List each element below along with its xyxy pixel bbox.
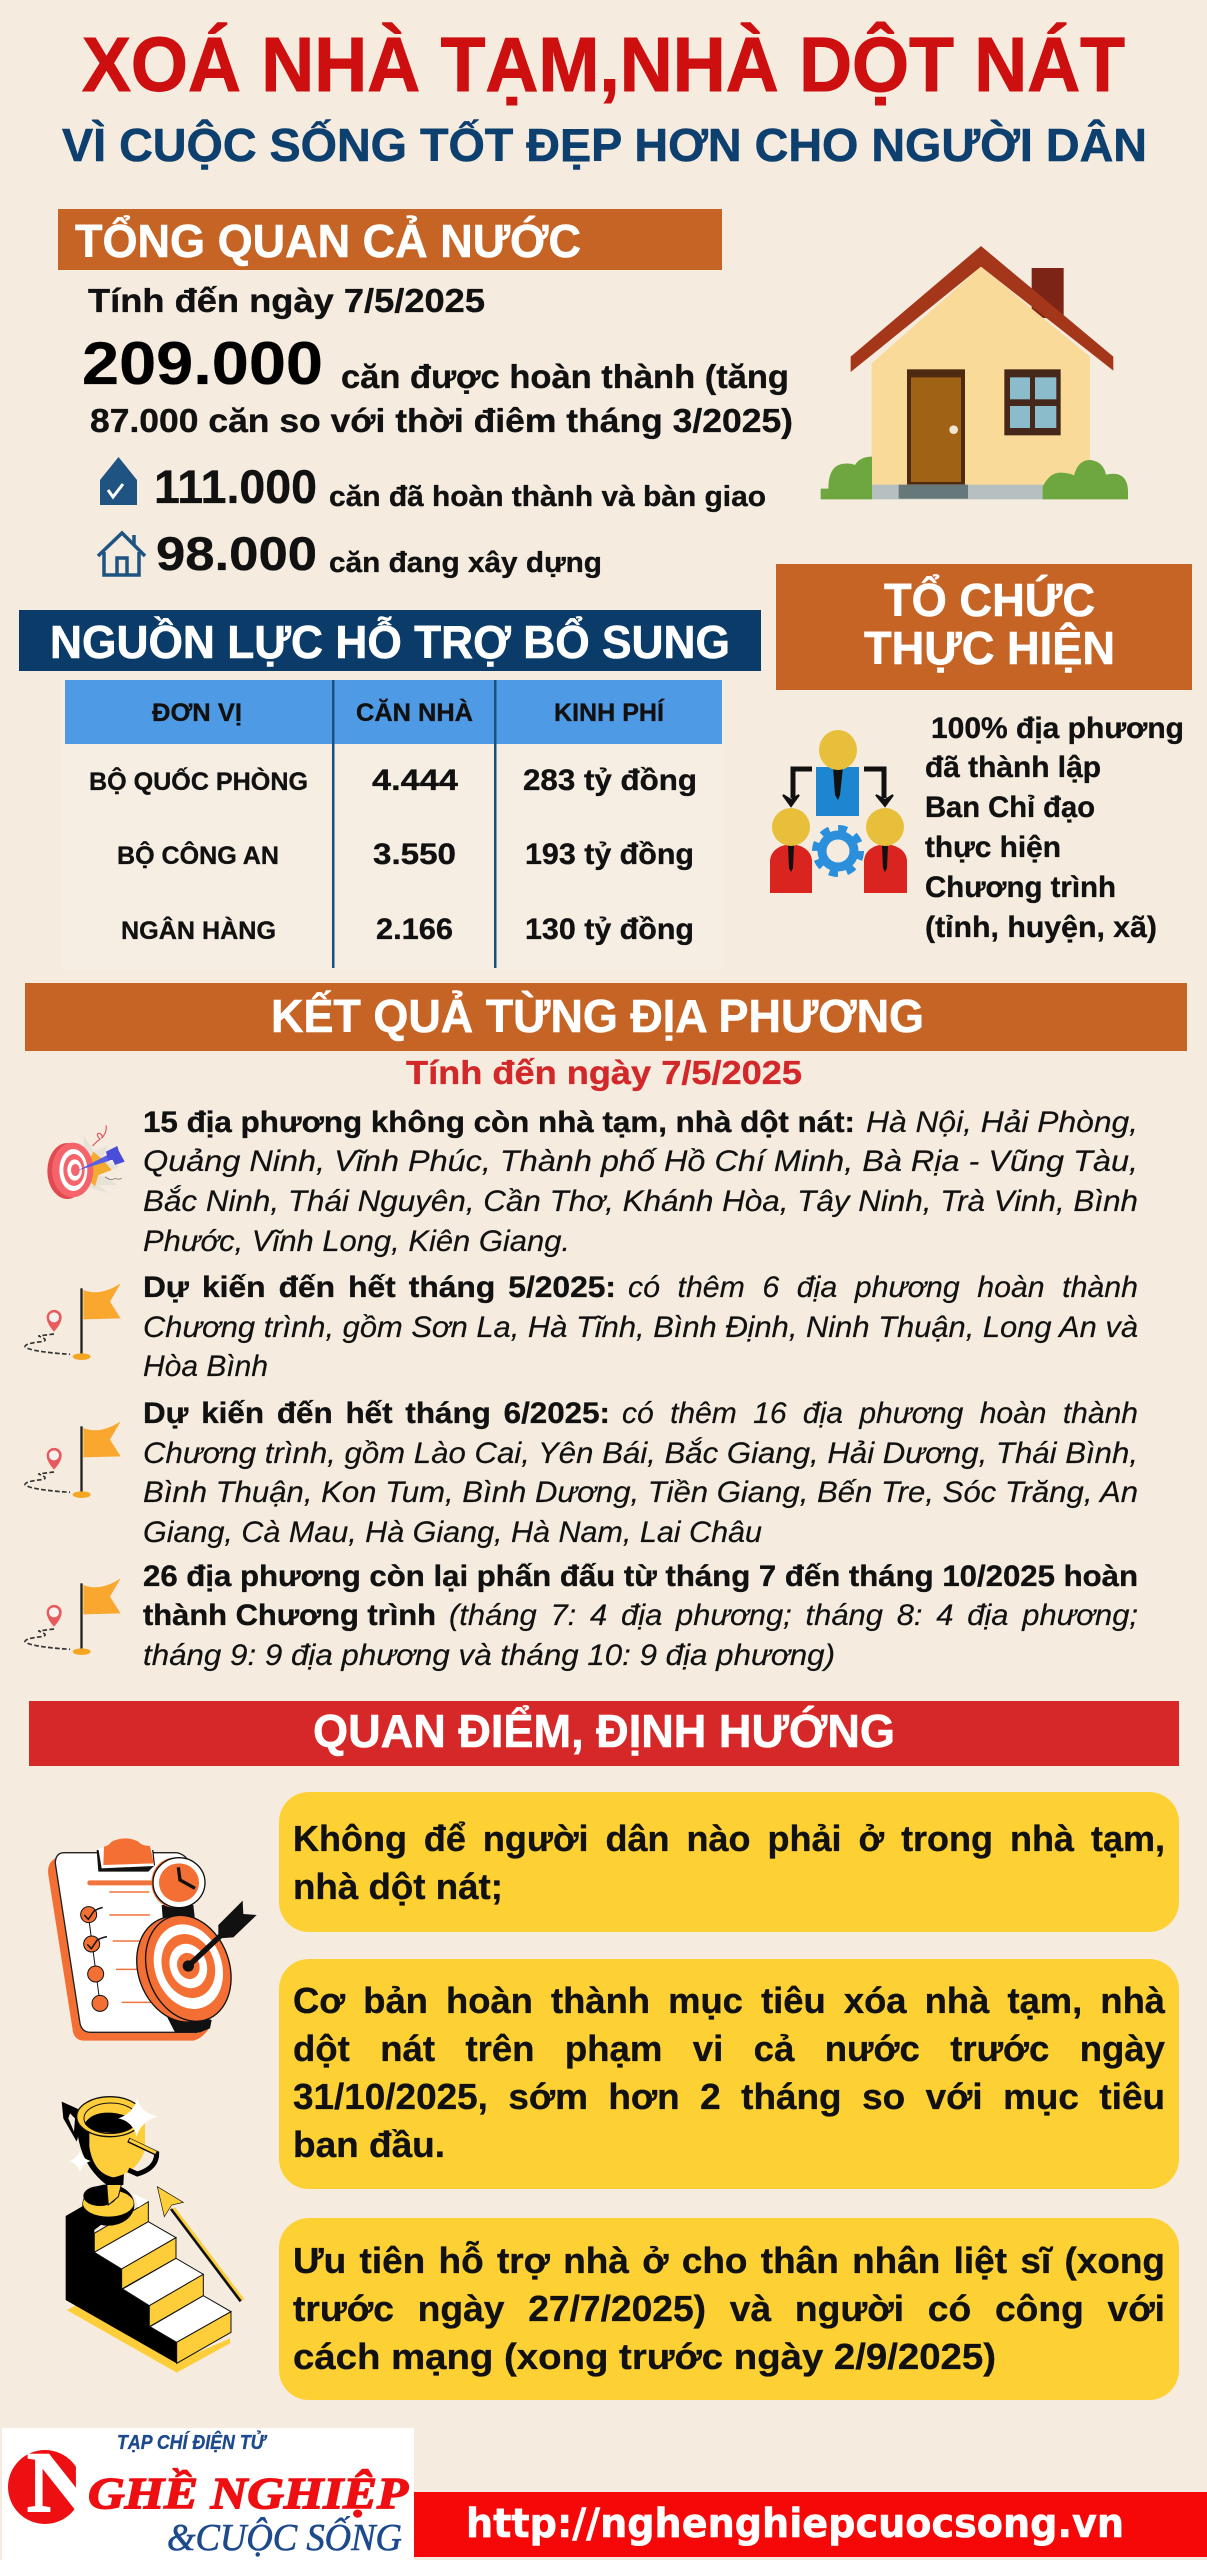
text: by end of 5/2025: Dự kiến đến hết tháng 5/2025: [143, 1271, 616, 1304]
stat: 98.000 under construction: 98.000 [156, 527, 317, 580]
table: 193 tỷ đồng [525, 838, 694, 871]
website banner: http://nghenghiepcuocsong.vn [466, 2501, 1124, 2547]
table: 283 tỷ đồng [523, 764, 697, 797]
text: by end of 5/2025 [143, 1271, 1138, 1383]
text: by end of 5/2025: có thêm 6 địa phương hoàn thành [628, 1271, 1138, 1304]
text: steering committee: (tỉnh, huyện, xã) [925, 911, 1157, 944]
website banner [414, 2492, 1207, 2557]
table: 3.550 [373, 838, 456, 871]
text: steering committee [925, 712, 1184, 944]
icon: flag 2 [25, 1421, 121, 1498]
stat: 98.000 under construction: căn đang xây dựng [329, 547, 602, 579]
heading: viewpoints: QUAN ĐIỂM, ĐỊNH HƯỚNG [313, 1705, 895, 1757]
table: KINH PHÍ [554, 698, 665, 727]
icon: team with gear [770, 730, 907, 893]
text: 15 localities: Phước, Vĩnh Long, Kiên Giang. [143, 1225, 570, 1258]
callout: complete before 31/10/2025: Cơ bản hoàn thành mục tiêu xóa nhà tạm, nhà [293, 1980, 1166, 2021]
heading: additional resources: NGUỒN LỰC HỖ TRỢ BỔ SUNG [50, 616, 730, 668]
stat: 209.000 completed: căn được hoàn thành (tăng [341, 358, 789, 395]
heading: implementation: TỔ CHỨC [884, 574, 1095, 626]
stat: 111.000 handed over: 111.000 [154, 460, 317, 513]
text: by end of 6/2025: Giang, Cà Mau, Hà Giang, Hà Nam, Lai Châu [143, 1516, 762, 1549]
panel: implementation [770, 564, 1192, 944]
logo: TẠP CHÍ ĐIỆN TỬ [117, 2430, 268, 2454]
text: remaining 26 localities: tháng 9: 9 địa phương và tháng 10: 9 địa phương) [143, 1639, 835, 1672]
callout: priority support: trước ngày 27/7/2025) và người có công với [293, 2288, 1165, 2329]
text: 15 localities [143, 1106, 1138, 1258]
table: BỘ QUỐC PHÒNG [89, 766, 308, 796]
stat: 98.000 under construction [156, 527, 602, 580]
callout: complete before 31/10/2025 [279, 1959, 1179, 2189]
text: 15 localities: Bắc Ninh, Thái Nguyên, Cần Thơ, Khánh Hòa, Tây Ninh, Trà Vinh, Bình [143, 1185, 1138, 1218]
icon: house outline [98, 533, 145, 575]
text: remaining 26 localities: 26 địa phương còn lại phấn đấu từ tháng 7 đến tháng 10/2025 hoàn [143, 1560, 1138, 1593]
icon: target [47, 1125, 125, 1199]
text: remaining 26 localities: (tháng 7: 4 địa phương; tháng 8: 4 địa phương; [449, 1599, 1138, 1632]
text: steering committee: Chương trình [925, 871, 1116, 904]
callout: priority support: Ưu tiên hỗ trợ nhà ở cho thân nhân liệt sĩ (xong [293, 2240, 1165, 2281]
text: by end of 6/2025 [143, 1397, 1138, 1549]
callout: priority support [279, 2218, 1179, 2400]
text: steering committee: 100% địa phương [931, 712, 1184, 745]
table: 4.444 [372, 764, 458, 797]
icon: flag 1 [25, 1283, 121, 1360]
callout: complete before 31/10/2025: ban đầu. [293, 2124, 445, 2165]
heading: local results: KẾT QUẢ TỪNG ĐỊA PHƯƠNG [271, 990, 924, 1042]
panel: national overview [58, 209, 793, 580]
text: date: Tính đến ngày 7/5/2025 [88, 282, 485, 319]
panel: viewpoints and orientation [29, 1701, 1179, 2400]
icon: house with check [100, 457, 137, 505]
heading: local results [25, 983, 1187, 1051]
subtitle: VÌ CUỘC SỐNG TỐT ĐẸP HƠN CHO NGƯỜI DÂN [62, 119, 1147, 171]
text: 15 localities: Quảng Ninh, Vĩnh Phúc, Thành phố Hồ Chí Minh, Bà Rịa - Vũng Tàu, [143, 1145, 1138, 1178]
stat: 111.000 handed over [154, 460, 766, 513]
logo: GHỀ NGHIỆP [88, 2468, 409, 2518]
text: by end of 6/2025: Dự kiến đến hết tháng 6/2025: [143, 1397, 610, 1430]
text: steering committee: đã thành lập [925, 751, 1101, 784]
callout: no one in temporary houses: Không để người dân nào phải ở trong nhà tạm, [293, 1818, 1165, 1859]
table: CĂN NHÀ [356, 698, 473, 727]
heading: viewpoints [29, 1701, 1179, 1766]
text: remaining 26 localities [143, 1560, 1138, 1672]
table [62, 680, 724, 970]
callout: no one in temporary houses: nhà dột nát; [293, 1866, 503, 1907]
callout: no one in temporary houses [279, 1792, 1179, 1932]
table: NGÂN HÀNG [121, 915, 276, 945]
logo [2, 2428, 414, 2560]
heading: overview: TỔNG QUAN CẢ NƯỚC [75, 215, 581, 267]
text: 15 localities: 15 địa phương không còn nhà tạm, nhà dột nát: [143, 1106, 855, 1139]
table: ĐƠN VỊ [152, 699, 242, 727]
logo: &CUỘC SỐNG [167, 2515, 402, 2559]
text: by end of 6/2025: có thêm 16 địa phương hoàn thành [622, 1397, 1138, 1430]
title: XOÁ NHÀ TẠM,NHÀ DỘT NÁT [82, 21, 1125, 108]
text: steering committee: thực hiện [925, 831, 1061, 864]
stat: 209.000 completed [82, 330, 793, 439]
text: by end of 6/2025: Bình Thuận, Kon Tum, Bình Dương, Tiền Giang, Bến Tre, Sóc Trăng, An [143, 1476, 1138, 1509]
heading: implementation: THỰC HIỆN [864, 622, 1115, 674]
text: by end of 6/2025: Chương trình, gồm Lào Cai, Yên Bái, Bắc Giang, Hải Dương, Thái Bình, [143, 1437, 1138, 1470]
heading: implementation [776, 564, 1192, 690]
stat: 209.000 completed: 87.000 căn so với thời điêm tháng 3/2025) [90, 402, 793, 439]
text: steering committee: Ban Chỉ đạo [925, 791, 1095, 824]
illustration: trophy on stairs [62, 2097, 243, 2373]
illustration: house [821, 246, 1128, 499]
text: red date: Tính đến ngày 7/5/2025 [406, 1054, 802, 1091]
text: remaining 26 localities: thành Chương trình [143, 1599, 436, 1632]
callout: complete before 31/10/2025: dột nát trên phạm vi cả nước trước ngày [293, 2028, 1165, 2069]
panel: local results [25, 983, 1187, 1672]
logo: N [27, 2434, 91, 2530]
panel: additional resources [19, 610, 761, 970]
stat: 111.000 handed over: căn đã hoàn thành và bàn giao [329, 481, 766, 513]
illustration: checklist and target [48, 1838, 257, 2041]
callout: priority support: cách mạng (xong trước ngày 2/9/2025) [293, 2336, 996, 2377]
heading: overview [58, 209, 722, 270]
icon: flag 3 [25, 1578, 121, 1655]
stat: 209.000 completed: 209.000 [82, 330, 323, 397]
table: BỘ CÔNG AN [117, 840, 279, 870]
table: 130 tỷ đồng [525, 913, 694, 946]
table: 2.166 [376, 913, 453, 946]
text: by end of 5/2025: Chương trình, gồm Sơn La, Hà Tĩnh, Bình Định, Ninh Thuận, Long An và [143, 1311, 1138, 1344]
text: 15 localities: Hà Nội, Hải Phòng, [866, 1106, 1138, 1139]
text: by end of 5/2025: Hòa Bình [143, 1350, 268, 1383]
callout: complete before 31/10/2025: 31/10/2025, sớm hơn 2 tháng so với mục tiêu [293, 2076, 1165, 2117]
